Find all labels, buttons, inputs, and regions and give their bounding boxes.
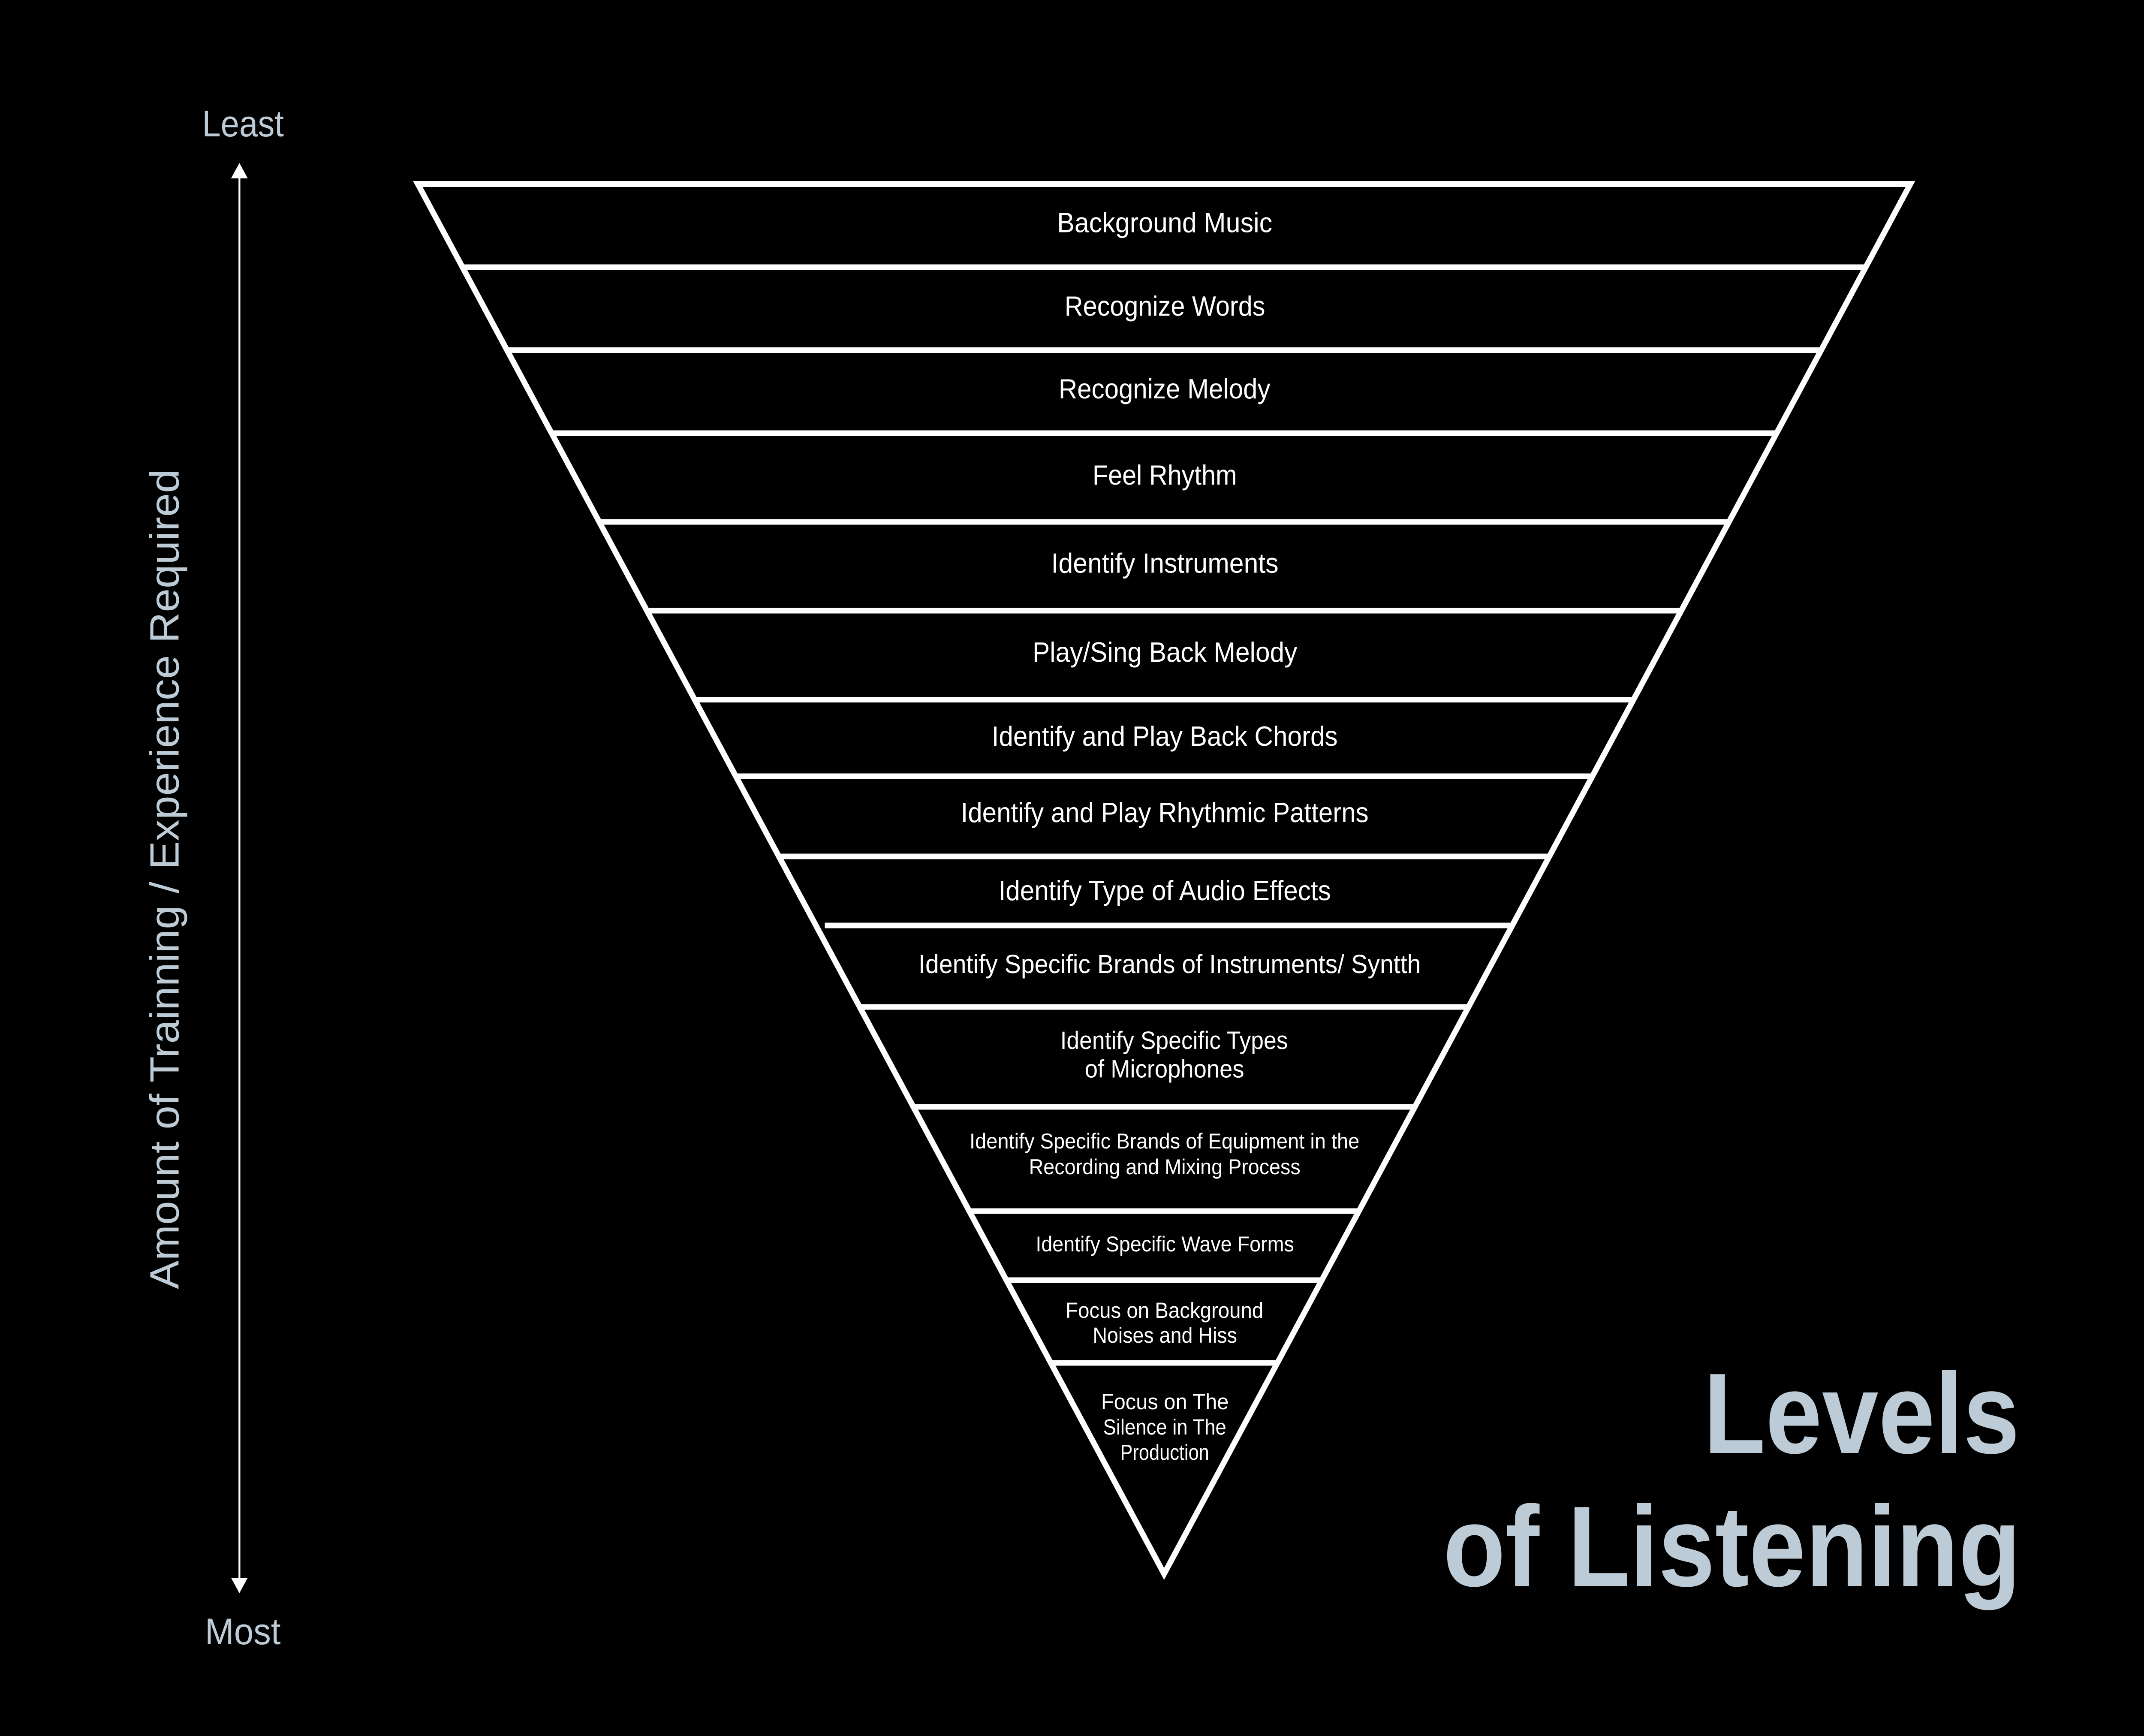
level 2 label: Recognize Words bbox=[1065, 291, 1265, 322]
level 15 label bbox=[1101, 1389, 1229, 1465]
level dividers bbox=[462, 267, 1866, 1363]
inverted pyramid diagram bbox=[418, 184, 1910, 1574]
level 12 label: Recording and Mixing Process bbox=[1029, 1155, 1301, 1179]
level 11 label: Identify Specific Types bbox=[1060, 1026, 1288, 1054]
level 14 label: Focus on Background bbox=[1066, 1298, 1263, 1323]
axis label: most: Most bbox=[205, 1611, 281, 1652]
title: Levels bbox=[1704, 1350, 2020, 1477]
title: of Listening bbox=[1443, 1483, 2021, 1611]
level 10 label: Identify Specific Brands of Instruments/ Syntth bbox=[918, 950, 1421, 979]
level 5 label: Identify Instruments bbox=[1051, 548, 1279, 579]
level 13 label: Identify Specific Wave Forms bbox=[1036, 1232, 1294, 1256]
level 12 label bbox=[970, 1129, 1359, 1179]
level 4 label: Feel Rhythm bbox=[1093, 460, 1237, 491]
level 9 label: Identify Type of Audio Effects bbox=[998, 875, 1331, 907]
title bbox=[1443, 1350, 2021, 1611]
level 6 label: Play/Sing Back Melody bbox=[1033, 637, 1298, 668]
level 3 label: Recognize Melody bbox=[1059, 374, 1271, 405]
axis title: amount of training: Amount of Trainning / Experience Required bbox=[142, 469, 188, 1289]
level 15 label: Production bbox=[1120, 1440, 1209, 1465]
level 15 label: Focus on The bbox=[1101, 1389, 1229, 1414]
level 14 label: Noises and Hiss bbox=[1093, 1323, 1237, 1347]
pyramid outline bbox=[418, 184, 1910, 1574]
axis label: least: Least bbox=[202, 103, 284, 145]
level 14 label bbox=[1066, 1298, 1263, 1347]
arrow: double-headed training axis bbox=[231, 163, 248, 1593]
level 7 label: Identify and Play Back Chords bbox=[992, 721, 1338, 752]
level 8 label: Identify and Play Rhythmic Patterns bbox=[961, 797, 1369, 829]
level 11 label: of Microphones bbox=[1085, 1055, 1244, 1083]
level 12 label: Identify Specific Brands of Equipment in the bbox=[970, 1129, 1359, 1153]
level 15 label: Silence in The bbox=[1103, 1415, 1226, 1439]
level 11 label bbox=[1060, 1026, 1288, 1083]
level 1 label: Background Music bbox=[1057, 207, 1272, 238]
